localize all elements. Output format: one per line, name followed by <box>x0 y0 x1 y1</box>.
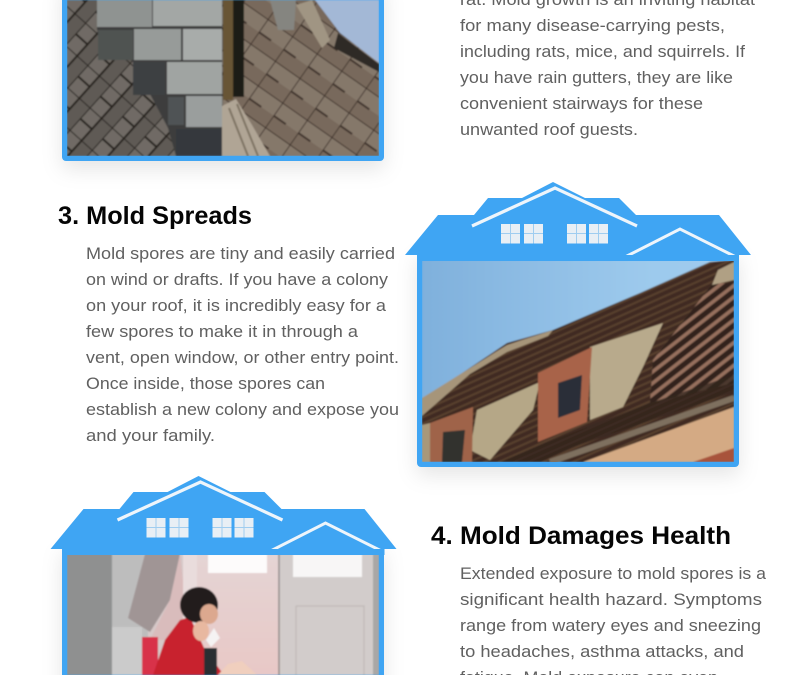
text: section 2 body: for many disease-carrying pests, <box>460 17 725 35</box>
text: section 3 body: few spores to make it in through a <box>86 323 359 341</box>
photo frame: house with dormers <box>417 250 739 467</box>
photo frame: damaged shingle roof <box>62 0 384 161</box>
text: section 3 body: Mold spores are tiny and easily carried <box>86 245 395 263</box>
heading: 4. Mold Damages Health: 4. Mold Damages Health <box>431 522 731 550</box>
text: section 3 body <box>86 245 399 445</box>
text: section 2 body: convenient stairways for these <box>460 95 703 113</box>
text: section 4 body: Extended exposure to mold spores is a <box>460 565 767 583</box>
text: section 2 body <box>460 0 755 139</box>
roof icon: section 3 <box>405 182 751 261</box>
photo frame: woman sneezing <box>62 545 384 675</box>
text: section 2 body: unwanted roof guests. <box>460 121 638 139</box>
text: section 3 body: on wind or drafts. If you have a colony <box>86 271 389 289</box>
text: section 4 body <box>460 565 767 675</box>
text: section 2 body: including rats, mice, and squirrels. If <box>460 43 745 61</box>
text: section 4 body: range from watery eyes and sneezing <box>460 617 761 635</box>
heading: 3. Mold Spreads: 3. Mold Spreads <box>58 202 252 230</box>
text: section 4 body: significant health hazard. Symptoms <box>460 591 762 609</box>
text: section 3 body: and your family. <box>86 427 215 445</box>
text: section 3 body: establish a new colony and expose you <box>86 401 399 419</box>
text: section 3 body: on your roof, it is incredibly easy for a <box>86 297 387 315</box>
text: section 3 body: vent, open window, or other entry point. <box>86 349 399 367</box>
text: section 3 body: Once inside, those spores can <box>86 375 325 393</box>
roof icon: section 4 <box>50 476 396 555</box>
text: section 2 body: you have rain gutters, they are like <box>460 69 733 87</box>
text: section 4 body: to headaches, asthma attacks, and <box>460 643 744 661</box>
